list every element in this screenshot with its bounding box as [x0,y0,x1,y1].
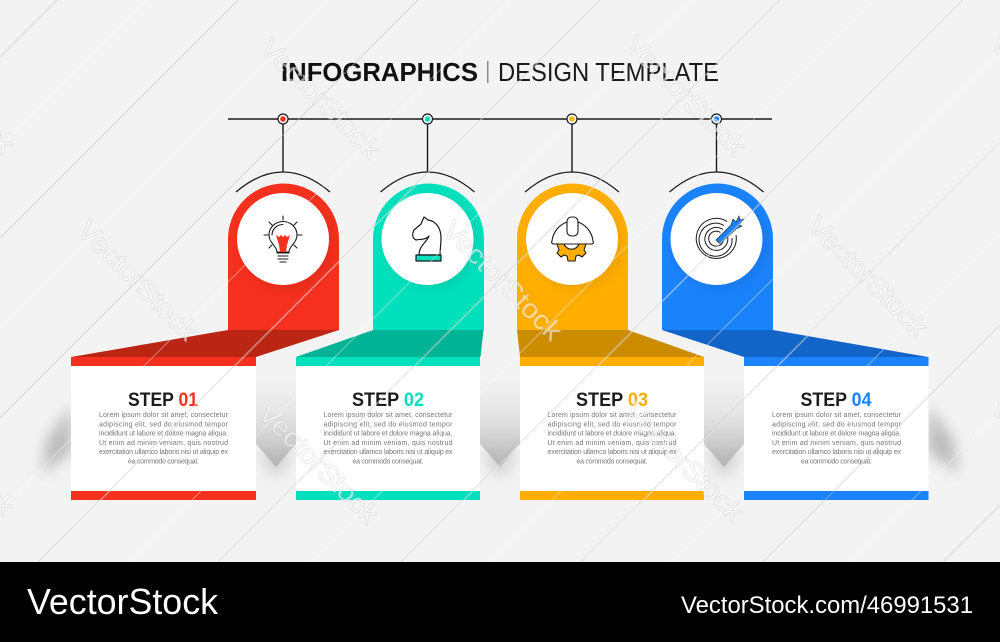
watermark text: VectorStock [255,33,387,165]
panel: step 2 [296,172,484,500]
heading: STEP 04 [800,390,872,411]
icon circle [670,193,767,290]
tab [662,184,773,330]
body text: Lorem ipsum dolor sit amet, consectetur [324,412,453,419]
body text: incididunt ut labore et dolore magna aliqua. [99,431,228,438]
body text [772,412,902,466]
timeline [228,114,772,172]
card [744,357,928,500]
fold [662,330,928,357]
icon: light bulb [264,216,302,262]
watermark text [0,28,1000,530]
arc [236,172,330,192]
watermark text: VectorStock [437,215,569,347]
footer logo: VectorStock [27,581,219,622]
watermark text: VectorStock [253,398,385,530]
arc [670,172,764,192]
body text: exercitation ullamco laboris nisi ut aliquip ex [772,449,902,456]
body text: ea commodo consequat. [352,458,424,466]
tab [373,184,484,330]
body text: ea commodo consequat. [801,458,872,466]
icon circle [382,193,478,290]
arc [380,172,474,192]
body text [324,412,453,466]
heading: STEP 03 [576,390,648,411]
footer bar [0,562,1000,642]
footer url: VectorStock.com/46991531 [681,592,973,619]
fold [517,330,704,357]
heading: STEP 02 [352,390,424,411]
watermark text: VectorStock [802,211,934,343]
icon circle [237,193,333,290]
body text [99,412,229,466]
watermark text: VectorStock [72,215,204,347]
body text: Ut enim ad minim veniam, quis nostrud [324,440,453,447]
body text: Ut enim ad minim veniam, quis nostrud [548,440,677,447]
side shadows behind cards [42,380,958,480]
watermark text: VectorStock [620,30,752,162]
body text: incididunt ut labore et dolore magna aliqua. [548,431,677,438]
body text: adipiscing elit, sed do eiusmod tempor [772,421,902,428]
body text: Lorem ipsum dolor sit amet, consectetur [772,412,902,419]
title: INFOGRAPHICS [281,59,478,87]
icon: helmet and gear [552,217,593,261]
body text: adipiscing elit, sed do eiusmod tempor [99,421,229,428]
panel: step 3 [517,172,704,500]
body text: exercitation ullamco laboris nisi ut aliquip ex [548,449,677,456]
tab [228,184,339,330]
card [71,357,256,500]
body text: ea commodo consequat. [128,458,199,466]
body text: incididunt ut labore et dolore magna aliqua. [772,431,901,438]
panel: step 1 [71,172,339,500]
body text [548,412,677,466]
card [520,357,704,500]
body text: adipiscing elit, sed do eiusmod tempor [324,421,453,428]
body text: Lorem ipsum dolor sit amet, consectetur [99,412,229,419]
body text: Ut enim ad minim veniam, quis nostrud [99,440,228,447]
body text: exercitation ullamco laboris nisi ut aliquip ex [324,449,453,456]
icon: chess knight [413,217,441,261]
card [296,357,480,500]
panel: step 4 [662,172,928,500]
tab [517,184,628,330]
watermark text: VectorStock [618,396,750,528]
title [281,59,719,87]
body text: exercitation ullamco laboris nisi ut aliquip ex [99,449,228,456]
body text: adipiscing elit, sed do eiusmod tempor [548,421,677,428]
icon circle [526,193,623,290]
heading: STEP 01 [128,390,198,411]
fold [296,330,484,357]
title: DESIGN TEMPLATE [498,59,719,87]
body text: ea commodo consequat. [576,458,648,466]
body text: incididunt ut labore et dolore magna aliqua. [324,431,453,438]
fold [71,330,339,357]
body text: Ut enim ad minim veniam, quis nostrud [772,440,901,447]
body text: Lorem ipsum dolor sit amet, consectetur [548,412,677,419]
arc [525,172,619,192]
icon: target with arrow [696,216,744,258]
